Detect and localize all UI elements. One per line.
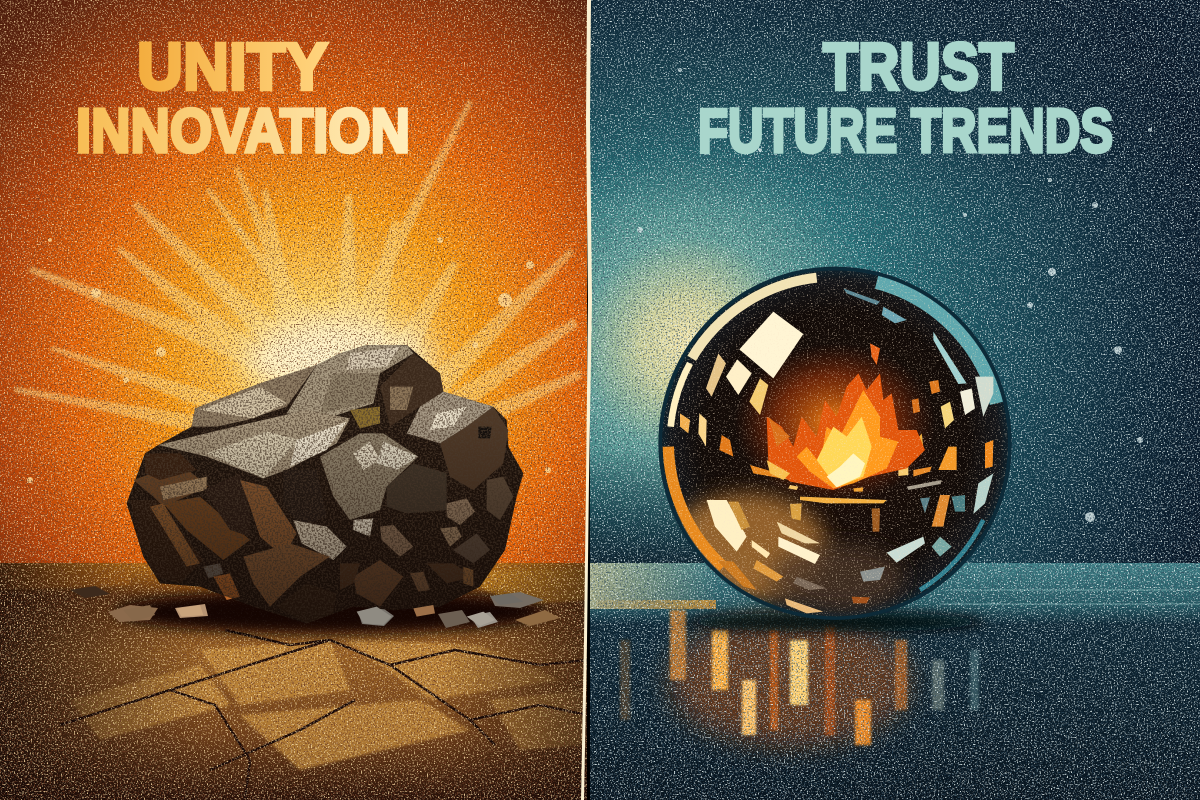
grain texture	[0, 0, 587, 800]
ground lit patches	[0, 568, 587, 770]
title: TRUST: TRUST	[823, 30, 1014, 104]
fire reflection on floor	[620, 610, 979, 745]
grain texture	[590, 0, 1200, 800]
reflective floor	[590, 563, 1200, 800]
panel: left orange side	[0, 0, 587, 800]
divider line	[581, 0, 592, 800]
lower reflections	[707, 500, 747, 552]
rim light	[692, 278, 817, 358]
icon: mirrored sphere with fire	[650, 260, 1020, 630]
title: INNOVATION: INNOVATION	[76, 97, 410, 166]
rock shadow	[115, 590, 545, 634]
glow behind rock	[245, 318, 435, 402]
ground cracks	[60, 630, 587, 800]
sphere shadow	[685, 612, 985, 632]
window reflections	[739, 312, 803, 378]
lower reflection	[667, 493, 827, 600]
rock surface mottling	[126, 345, 524, 623]
light rays	[14, 100, 582, 436]
flame streak band	[800, 497, 887, 503]
rock debris	[70, 586, 560, 628]
icon: rock	[126, 345, 524, 624]
fire	[767, 343, 925, 490]
heading: right	[698, 30, 1113, 166]
second rock debris row	[123, 593, 523, 626]
ground	[0, 563, 587, 800]
snow specks	[637, 68, 1152, 522]
dust specks	[27, 228, 551, 483]
title: UNITY: UNITY	[137, 30, 328, 104]
heading: left	[76, 30, 410, 166]
panel: right teal side	[590, 0, 1200, 800]
sphere grain	[662, 270, 1008, 616]
